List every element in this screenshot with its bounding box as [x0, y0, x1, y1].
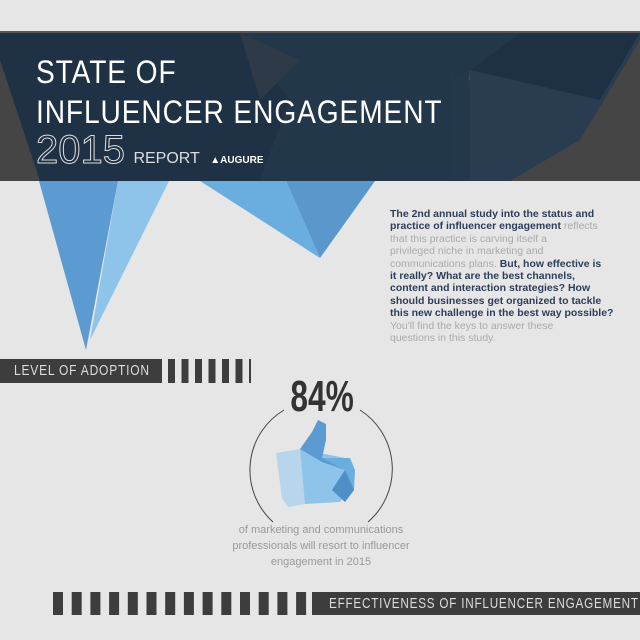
section label: level of adoption: LEVEL OF ADOPTION [14, 362, 150, 379]
intro paragraph: should businesses get organized to tackle [390, 295, 601, 307]
title [36, 54, 443, 130]
intro paragraph: questions in this study. [390, 332, 495, 344]
stat 84%: 84% [290, 372, 354, 421]
intro paragraph: practice of influencer engagement reflects [390, 220, 598, 232]
intro paragraph: content and interaction strategies? How [390, 282, 590, 294]
caption: of marketing and communications professionals will resort to influencer engagement in 2015 [232, 524, 410, 568]
intro paragraph: communications plans. But, how effective is [390, 258, 601, 270]
intro paragraph [390, 208, 613, 344]
section label: effectiveness: EFFECTIVENESS OF INFLUENCER ENGAGEMENT [329, 595, 639, 612]
title: STATE OF [36, 54, 177, 90]
title: INFLUENCER ENGAGEMENT [36, 94, 443, 130]
intro paragraph: You'll find the keys to answer these [390, 320, 553, 332]
section label: effectiveness [53, 592, 640, 615]
intro paragraph: privileged niche in marketing and [390, 245, 544, 257]
intro paragraph: this new challenge in the best way possible? [390, 307, 613, 319]
circle arc and thumb icon [249, 410, 393, 522]
section label: level of adoption [0, 359, 251, 383]
intro paragraph: that this practice is carving itself a [390, 233, 547, 245]
intro paragraph: The 2nd annual study into the status and [390, 208, 594, 220]
header band with polygons [0, 31, 640, 350]
intro paragraph: it really? What are the best channels, [390, 270, 575, 282]
blue triangles [39, 181, 118, 350]
